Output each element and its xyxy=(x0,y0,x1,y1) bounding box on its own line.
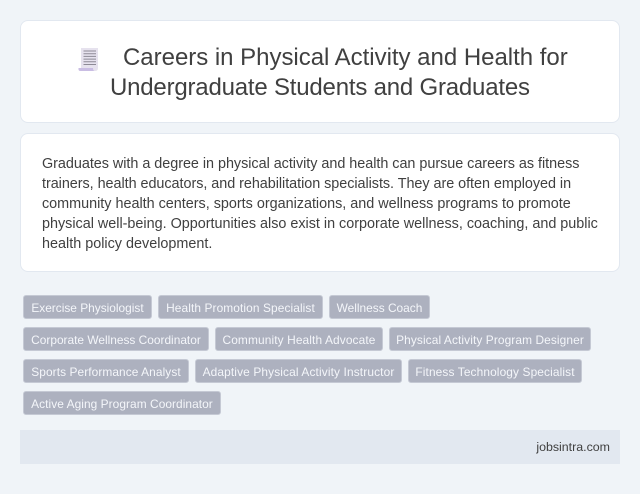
description text: health policy development. xyxy=(42,236,212,252)
description text xyxy=(42,156,598,252)
tag xyxy=(23,391,221,415)
title line 1: Careers in Physical Activity and Health for xyxy=(123,44,568,71)
tag xyxy=(23,327,209,351)
title line 2: Undergraduate Students and Graduates xyxy=(110,74,530,101)
panel: description card xyxy=(20,133,620,272)
tag: Community Health Advocate xyxy=(222,333,376,347)
tag: Corporate Wellness Coordinator xyxy=(31,333,201,347)
tag: Health Promotion Specialist xyxy=(166,301,315,315)
tag: Physical Activity Program Designer xyxy=(396,333,584,347)
description text: Graduates with a degree in physical activity and health can pursue careers as fitness xyxy=(42,156,579,172)
description text: physical well-being. Opportunities also exist in corporate wellness, coaching, and public xyxy=(42,216,598,232)
tag xyxy=(408,359,582,383)
tag xyxy=(23,359,189,383)
tag: Exercise Physiologist xyxy=(31,301,144,315)
description text: trainers, health educators, and rehabilitation specialists. They are often employed in xyxy=(42,176,571,192)
tag: Active Aging Program Coordinator xyxy=(31,397,213,411)
footer bar xyxy=(20,430,620,464)
tag xyxy=(158,295,323,319)
tag: Wellness Coach xyxy=(337,301,422,315)
tag xyxy=(195,359,402,383)
tag: Adaptive Physical Activity Instructor xyxy=(203,365,394,379)
tag xyxy=(23,295,152,319)
tag xyxy=(329,295,430,319)
tag: Fitness Technology Specialist xyxy=(415,365,575,379)
description text: community health centers, sports organizations, and wellness programs to promote xyxy=(42,196,571,212)
tag: Sports Performance Analyst xyxy=(31,365,181,379)
icon: paper scroll xyxy=(78,48,98,71)
tag xyxy=(389,327,591,351)
panel: title card xyxy=(20,20,620,123)
career tags xyxy=(23,295,591,415)
footer source: jobsintra.com xyxy=(536,440,610,454)
tag xyxy=(215,327,383,351)
